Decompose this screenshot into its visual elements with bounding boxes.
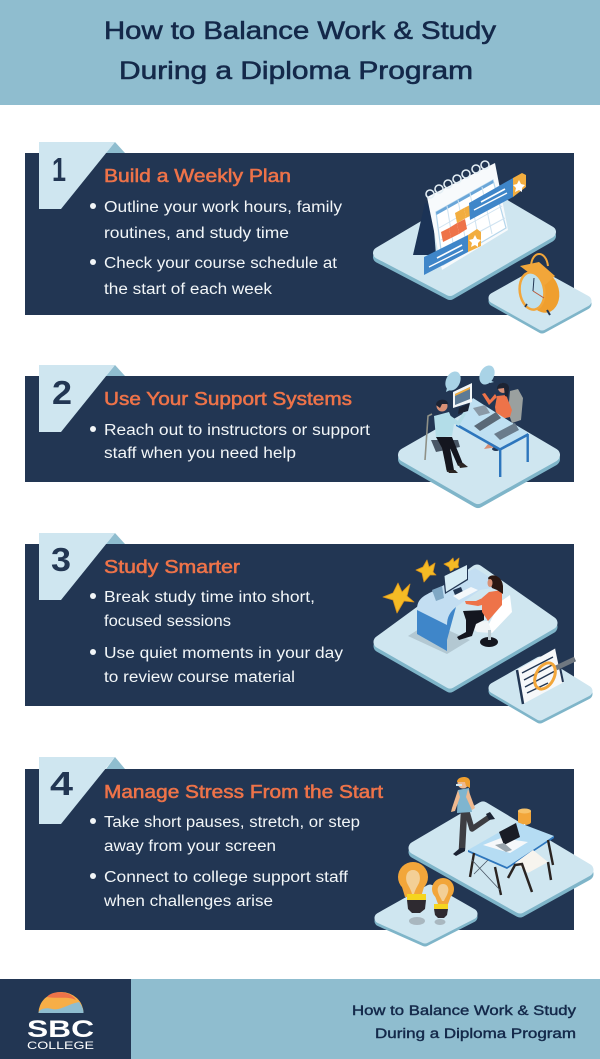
number badge 3: 3 (51, 541, 71, 578)
illustration: person studying at desk (380, 558, 551, 686)
chair (508, 850, 551, 892)
bullet list: routines, and study time (104, 225, 289, 242)
bullet list (90, 199, 342, 298)
illustration: two people at a desk (405, 363, 553, 501)
bullet list: Use quiet moments in your day (104, 645, 343, 662)
logo wordmark (27, 1016, 94, 1052)
panel: step 4 manage stress (25, 757, 587, 941)
panel: step 1 build a weekly plan (25, 142, 586, 328)
footer title: During a Diploma Program (375, 1026, 576, 1041)
desk (417, 568, 504, 651)
stars (383, 558, 459, 613)
person (457, 575, 512, 647)
title: During a Diploma Program (119, 57, 473, 85)
number badge 2: 2 (52, 374, 72, 411)
bullet list: Check your course schedule at (104, 255, 338, 272)
illustration: magnifier over document (494, 648, 587, 718)
logo sun icon (38, 992, 84, 1013)
bullet list: staff when you need help (104, 445, 296, 462)
bullet list (90, 589, 343, 686)
number badge 1 (39, 142, 125, 209)
bullet list: away from your screen (104, 838, 276, 855)
desk (456, 398, 529, 477)
panel: step 2 use your support systems (25, 363, 574, 501)
runner (451, 777, 495, 856)
bullet list: Reach out to instructors or support (104, 422, 371, 439)
illustration: runner and desk on platform (415, 777, 587, 911)
title (104, 17, 497, 85)
illustration: calendar on platform (379, 161, 550, 294)
bullet list: Break study time into short, (104, 589, 315, 606)
illustration: alarm clock on platform (494, 254, 586, 328)
bullet list: when challenges arise (103, 893, 273, 910)
heading: Study Smarter (104, 556, 240, 577)
heading: Build a Weekly Plan (104, 165, 291, 186)
footer title: How to Balance Work & Study (352, 1003, 576, 1018)
number badge 4: 4 (50, 765, 74, 802)
illustration: light bulbs on platform (380, 862, 472, 941)
monitor (453, 383, 472, 414)
panel: step 3 study smarter (25, 533, 587, 718)
lamp (518, 808, 531, 834)
number badge 1: 1 (52, 151, 66, 188)
event card top (469, 173, 526, 220)
bullet list (90, 814, 360, 910)
logo wordmark: SBC (27, 1016, 94, 1043)
man in chair (425, 400, 468, 473)
monitor (443, 563, 478, 600)
number badge 2 (39, 365, 125, 432)
bullet list: focused sessions (104, 613, 231, 630)
bullet list: to review course material (104, 669, 295, 686)
footer title (352, 1003, 576, 1041)
speech bubbles (442, 363, 498, 393)
header banner (0, 0, 600, 105)
title: How to Balance Work & Study (104, 17, 497, 45)
desk (468, 822, 554, 895)
number badge 4 (39, 757, 125, 824)
heading: Manage Stress From the Start (104, 781, 383, 802)
logo wordmark: COLLEGE (27, 1040, 94, 1052)
event card bottom (424, 229, 481, 275)
bullet list: Outline your work hours, family (104, 199, 342, 216)
logo block (0, 979, 131, 1059)
footer band (0, 979, 600, 1059)
heading: Use Your Support Systems (104, 388, 352, 409)
bullet list: Connect to college support staff (104, 869, 349, 886)
woman (482, 383, 523, 451)
bullet list (90, 422, 371, 462)
bullet list: the start of each week (104, 281, 272, 298)
bullet list: Take short pauses, stretch, or step (104, 814, 360, 831)
number badge 3 (39, 533, 125, 600)
